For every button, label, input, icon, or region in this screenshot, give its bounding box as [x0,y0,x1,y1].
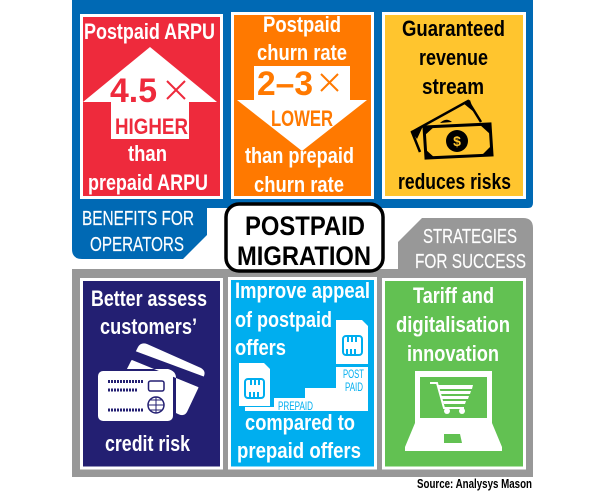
card: improve appeal: prepaid offers [237,438,361,463]
icon: steps: POST [343,367,364,381]
card: postpaid churn rate: than prepaid [245,143,354,168]
card: postpaid churn rate: LOWER [271,106,333,131]
heading: strategies for success: FOR SUCCESS [415,251,526,273]
icon: prepaid SIM [239,363,270,406]
card: postpaid ARPU [82,16,222,198]
source note: Source: Analysys Mason [417,476,532,491]
card: postpaid churn rate: 2–3 [257,65,313,103]
card: tariff and digitalisation innovation: digitalisation [396,312,510,337]
card: credit risk: Better assess [91,286,207,311]
icon: times sign [321,74,338,91]
card: postpaid churn rate: churn rate [257,40,347,65]
card: improve appeal: of postpaid [235,307,332,332]
heading: benefits for operators: BENEFITS FOR [82,208,194,230]
heading: strategies for success [415,226,526,273]
card: guaranteed revenue stream: revenue [419,45,488,70]
card: postpaid churn rate [232,12,372,198]
card: postpaid ARPU: prepaid ARPU [88,170,208,195]
card: guaranteed revenue stream: Guaranteed [402,16,505,41]
card: tariff and digitalisation innovation [384,280,524,468]
card: guaranteed revenue stream [384,14,524,198]
card: postpaid churn rate: Postpaid [263,12,341,37]
card: postpaid ARPU: than [128,141,167,166]
icon: steps: PAID [345,380,363,394]
panel: benefits for operators [72,0,533,259]
card: postpaid ARPU: HIGHER [115,114,188,139]
title: postpaid migration: POSTPAID [245,211,365,241]
heading: strategies for success: STRATEGIES [423,226,517,248]
card: credit risk: credit risk [105,431,191,456]
card: tariff and digitalisation innovation: Tariff and [413,283,494,308]
icon: credit cards [98,343,205,421]
icon: postpaid SIM [336,320,368,364]
icon: steps [245,367,368,413]
icon: banknotes: $ [453,133,461,149]
icon: banknotes [411,100,492,158]
card: guaranteed revenue stream: stream [422,74,484,99]
icon: down arrow [237,66,367,151]
card: postpaid churn rate: churn rate [254,172,344,197]
card: improve appeal: offers [235,335,286,360]
card: tariff and digitalisation innovation: innovation [407,341,499,366]
card: guaranteed revenue stream: reduces risks [398,169,511,194]
card: improve appeal: Improve appeal [235,278,370,303]
card: improve appeal: compared to [245,410,355,435]
title: postpaid migration: MIGRATION [237,241,371,271]
icon: up arrow [83,47,217,139]
icon: times sign [167,81,185,99]
icon: steps: PREPAID [278,399,313,413]
card: postpaid ARPU: 4.5 [110,72,157,110]
card: credit risk [82,280,222,468]
card: improve appeal [230,278,376,468]
card: postpaid ARPU: Postpaid ARPU [84,19,215,44]
icon: laptop with cart [405,371,502,451]
panel: strategies for success [72,218,533,477]
card: credit risk: customers’ [100,314,197,339]
heading: benefits for operators [82,208,194,256]
heading: benefits for operators: OPERATORS [90,234,184,256]
title: postpaid migration [226,204,383,271]
